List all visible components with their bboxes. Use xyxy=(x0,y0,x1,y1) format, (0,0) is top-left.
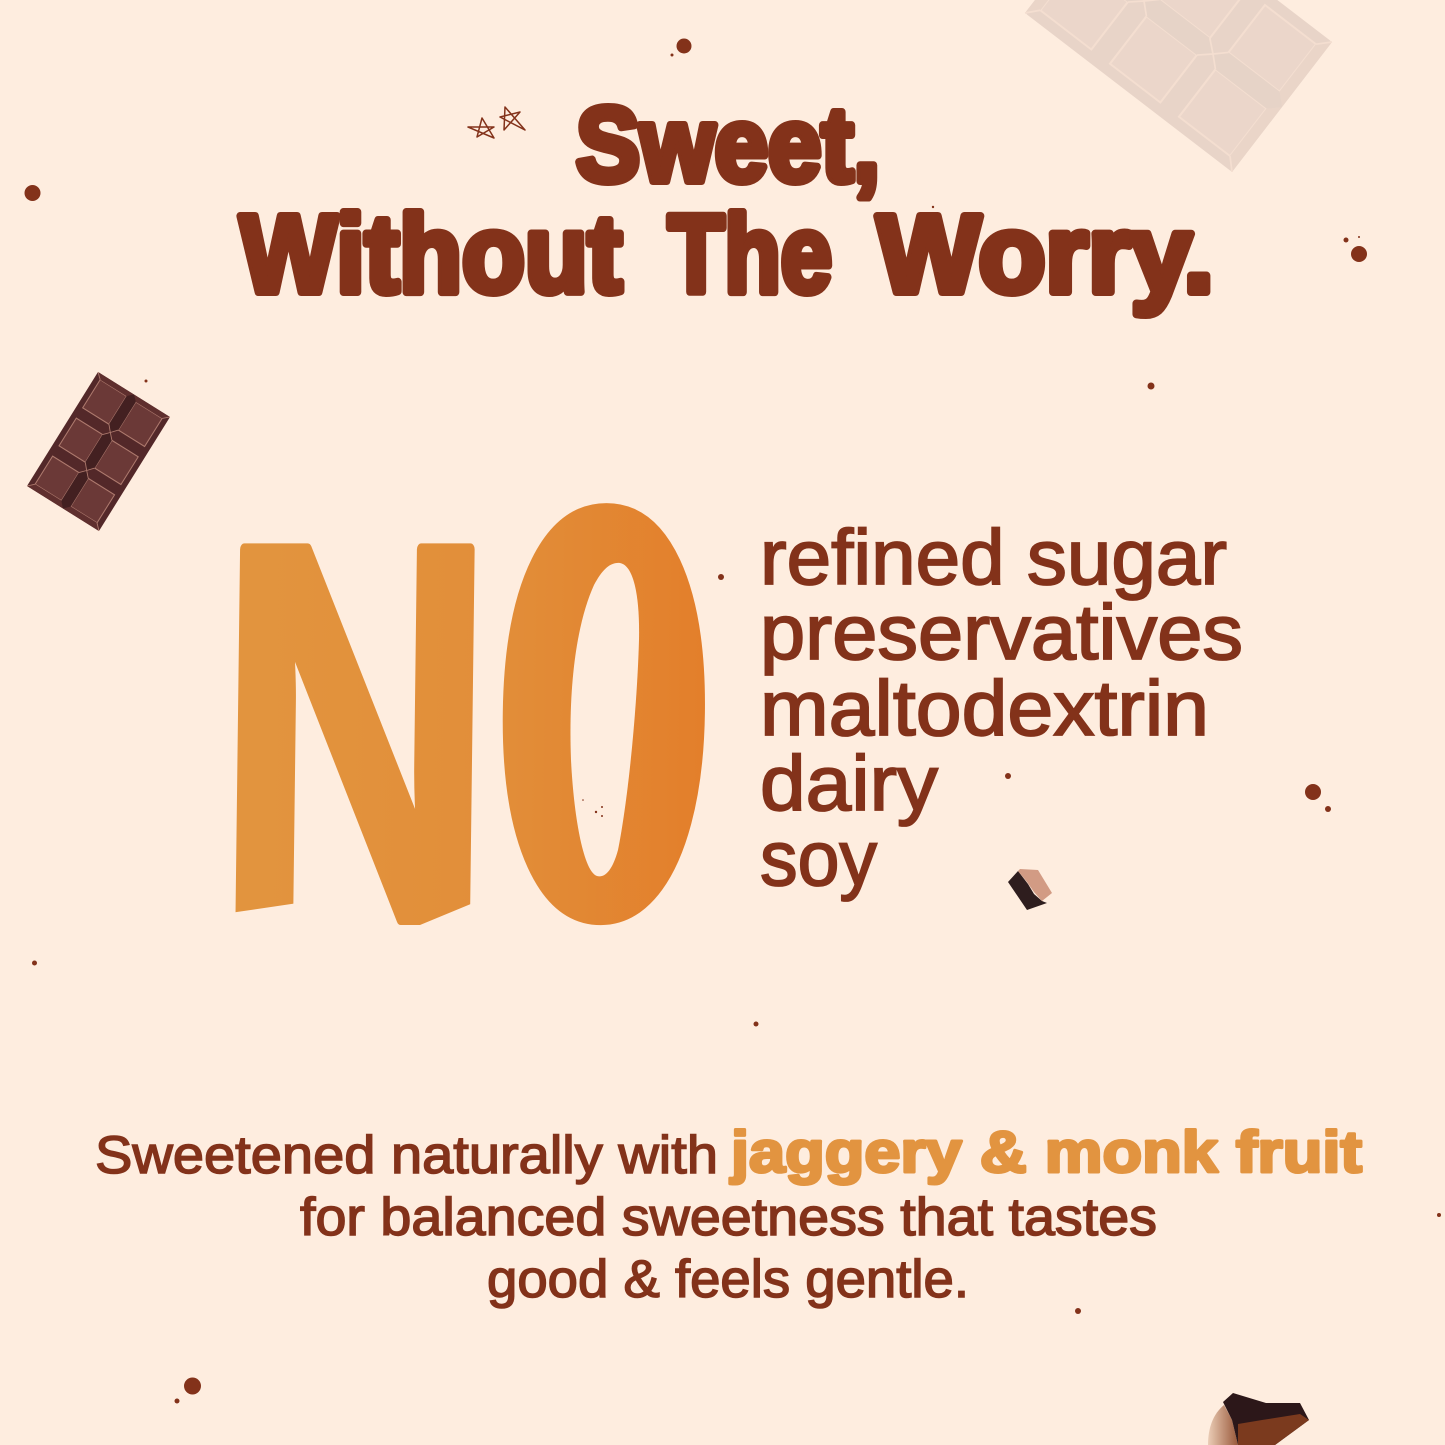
big word NO: O xyxy=(496,404,712,1021)
title xyxy=(240,86,1214,316)
title: Worry. xyxy=(877,193,1214,316)
list of excluded ingredients: refined sugar xyxy=(760,513,1227,601)
title: Without xyxy=(240,193,622,316)
list of excluded ingredients xyxy=(760,513,1243,902)
big word NO: N xyxy=(213,434,498,1034)
closing statement: jaggery & monk fruit xyxy=(730,1120,1362,1185)
icon: pale chocolate bar xyxy=(1025,0,1332,172)
closing statement xyxy=(95,1120,1362,1309)
title: The xyxy=(668,193,832,316)
closing statement: good & feels gentle. xyxy=(487,1250,969,1309)
title: Sweet, xyxy=(576,86,880,204)
icon: hand-drawn stars xyxy=(468,107,525,138)
list of excluded ingredients: soy xyxy=(760,814,877,902)
list of excluded ingredients: preservatives xyxy=(760,588,1243,676)
list of excluded ingredients: dairy xyxy=(760,739,938,827)
icon: chocolate piece bottom right xyxy=(1208,1393,1309,1445)
icon: dark chocolate bar xyxy=(27,372,170,531)
big word NO xyxy=(213,404,712,1034)
closing statement: for balanced sweetness that tastes xyxy=(300,1188,1157,1247)
closing statement: Sweetened naturally with xyxy=(95,1126,718,1185)
icon: small chocolate chunk xyxy=(1008,869,1052,910)
list of excluded ingredients: maltodextrin xyxy=(760,664,1209,752)
